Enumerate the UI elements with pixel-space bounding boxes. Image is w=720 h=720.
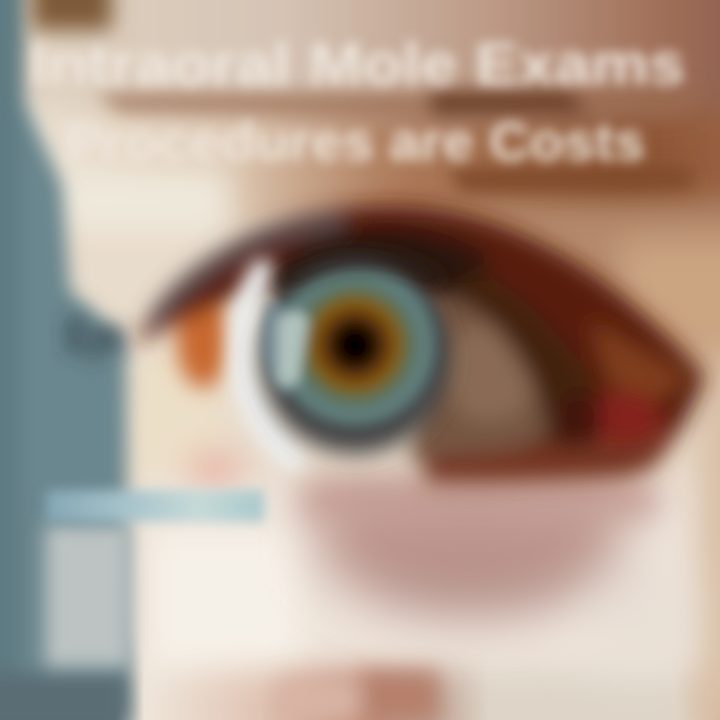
limbal ring [261,266,449,454]
lower lid [425,425,672,483]
iris left tone [262,300,305,395]
eye [135,205,705,483]
white of the eye [241,272,292,458]
panel header band [46,490,264,522]
sclera [410,298,568,462]
panel body [45,525,130,667]
iris and pupil [262,257,443,433]
red outer corner [589,392,661,444]
left sidebar strip [0,0,128,720]
brown corner patch [32,0,112,30]
title line 2: Procedures are Costs [65,112,645,172]
chin shadow [280,672,438,720]
orange inner corner [177,292,229,388]
info panel [45,490,264,667]
sidebar dark label: Eye [66,307,124,363]
dark outer corner crease [455,270,595,445]
brown lid fold [590,320,690,400]
upper eyelid [135,205,705,470]
upper lid over iris [270,250,450,286]
title line 1: Intraoral Mole Exams [30,32,685,97]
pink shadow under the eye [320,485,685,670]
title [30,32,685,172]
title band shadow [95,88,700,192]
eyelid and sclera [135,205,705,483]
iris highlight [278,312,308,384]
